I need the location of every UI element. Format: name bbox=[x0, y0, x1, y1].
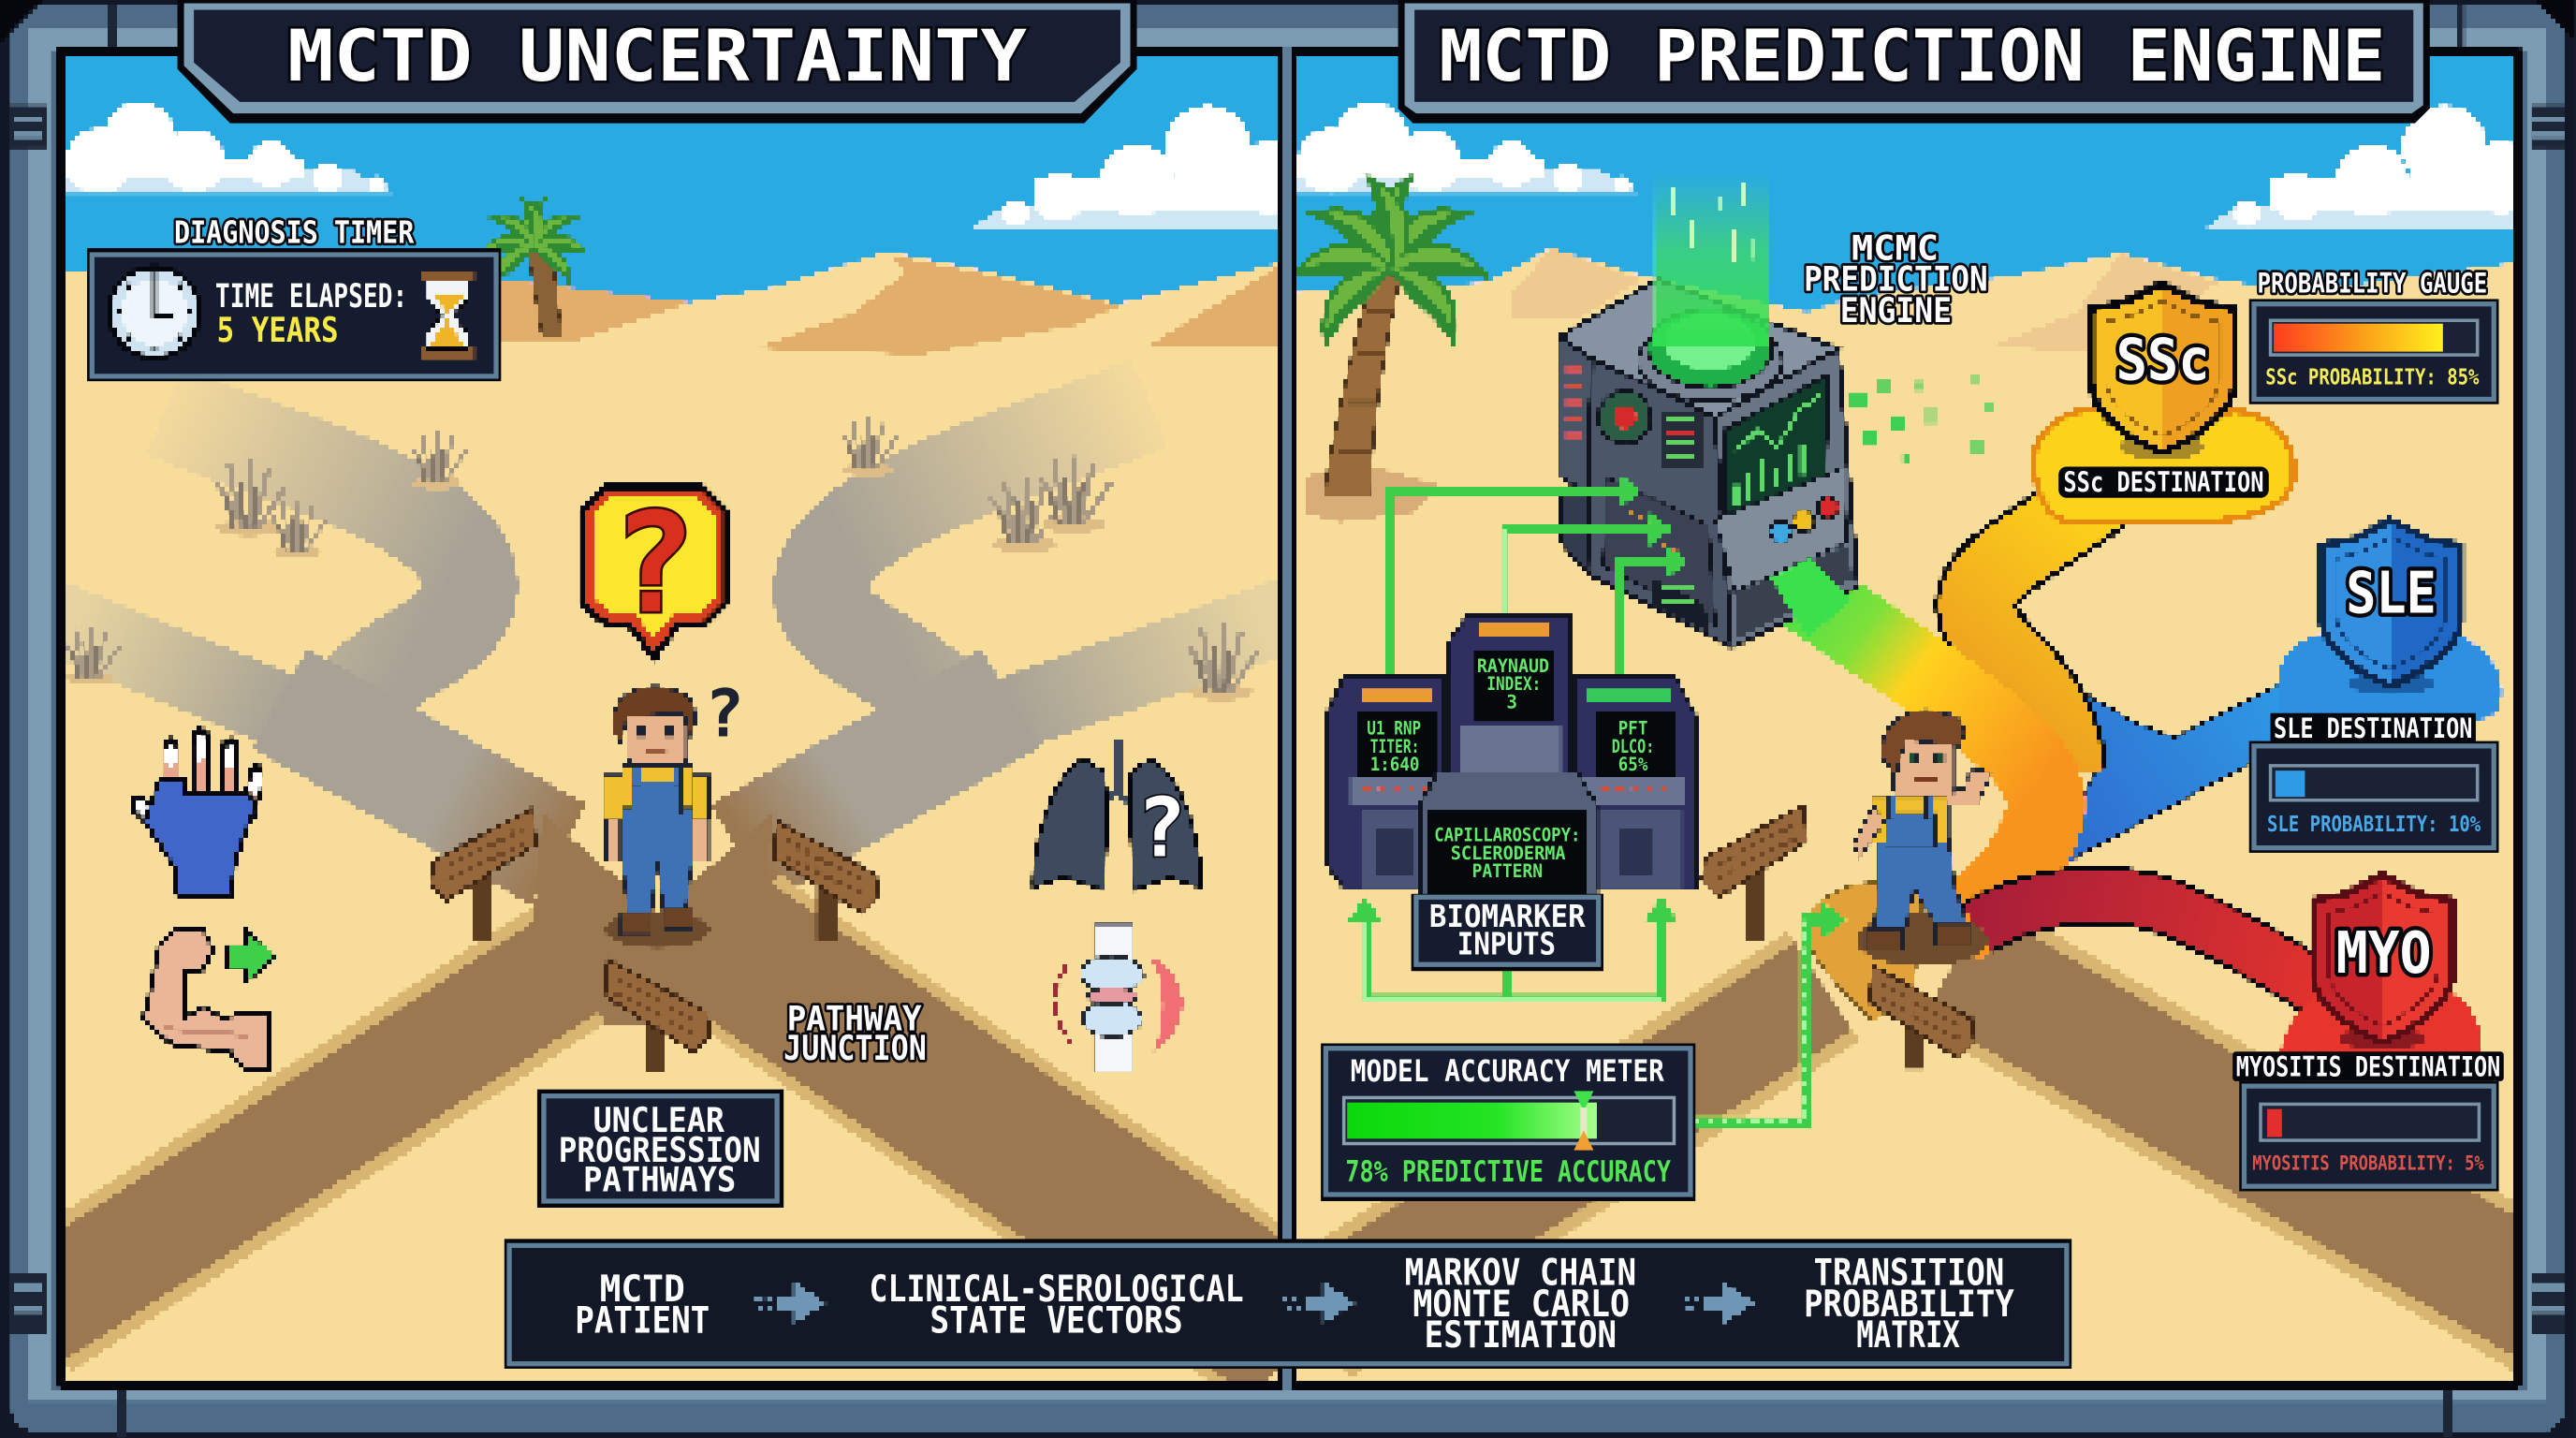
probability gauge: SLE: SLE PROBABILITY: 10% bbox=[2267, 813, 2481, 837]
right desert scene bbox=[1288, 57, 2563, 1380]
title banner: MCTD Uncertainty: MCTD UNCERTAINTY bbox=[287, 15, 1028, 97]
pathway junction label bbox=[783, 998, 927, 1068]
SLE destination pathway bbox=[2008, 633, 2502, 912]
dunes, right panel bbox=[1298, 248, 2513, 1380]
probability gauge: SSc: SSc PROBABILITY: 85% bbox=[2265, 366, 2480, 390]
probability gauge: myositis bbox=[2239, 1081, 2499, 1191]
arcade cabinet: U1 RNP bbox=[1325, 677, 1444, 889]
probability gauge: SSc: PROBABILITY GAUGE bbox=[2258, 267, 2487, 299]
accuracy connector arrow bbox=[1692, 901, 1847, 1123]
step: Markov chain Monte Carlo estimation: MONTE CARLO bbox=[1412, 1283, 1630, 1326]
step: Markov chain Monte Carlo estimation bbox=[1405, 1251, 1636, 1357]
green reactor dome bbox=[1638, 309, 1782, 401]
arrow: state vectors to estimation bbox=[1283, 1282, 1355, 1325]
pathway junction label: JUNCTION bbox=[783, 1028, 927, 1068]
confused patient character bbox=[605, 686, 710, 948]
step: MCTD patient: PATIENT bbox=[575, 1299, 710, 1342]
shield label: SLE: SLE bbox=[2346, 561, 2437, 627]
icons over panels bbox=[107, 265, 1754, 1325]
speech bubble with question mark bbox=[578, 483, 729, 664]
brown pathway junction bbox=[33, 814, 1298, 1339]
signposts, left panel bbox=[431, 809, 879, 1073]
bottom pipeline bar bbox=[505, 1239, 2071, 1369]
left desert scene bbox=[33, 57, 1305, 1380]
MCMC prediction engine label: MCMC bbox=[1852, 227, 1939, 268]
title banner: MCTD Prediction Engine bbox=[1398, 0, 2430, 124]
unclear progression pathways label: UNCLEAR bbox=[593, 1100, 725, 1140]
arcade screen text: Raynaud index: 3 bbox=[1506, 691, 1517, 712]
arrow: patient to state vectors bbox=[755, 1282, 827, 1325]
arcade screen text: U1 RNP titer: 1:640 bbox=[1370, 754, 1419, 775]
arcade screen text: capillaroscopy bbox=[1434, 825, 1580, 882]
probability gauge: SSc bbox=[2249, 267, 2499, 404]
step: transition probability matrix: PROBABILITY bbox=[1804, 1283, 2014, 1326]
myositis destination label: MYOSITIS DESTINATION bbox=[2236, 1051, 2500, 1083]
arcade screen text: Raynaud index bbox=[1477, 655, 1549, 712]
icon: hourglass bbox=[420, 271, 475, 359]
diagnosis timer panel bbox=[87, 214, 501, 381]
machine gear panel bbox=[1566, 370, 1715, 633]
MCMC prediction engine machine bbox=[1559, 172, 1858, 648]
arcade screen text: Raynaud index: INDEX: bbox=[1486, 673, 1541, 695]
icon: muscle weakness arm bbox=[143, 929, 276, 1071]
MCMC prediction engine label bbox=[1804, 227, 1988, 330]
faded gray pathways bbox=[50, 403, 1298, 855]
icon: joint bbox=[1055, 923, 1182, 1071]
arrow: estimation to matrix bbox=[1684, 1282, 1754, 1325]
model accuracy meter: MODEL ACCURACY METER bbox=[1351, 1055, 1665, 1089]
clouds, left panel bbox=[64, 102, 1305, 230]
biomarker inputs label: BIOMARKER bbox=[1429, 898, 1587, 934]
arcade screen text: PFT DLCO: PFT bbox=[1618, 718, 1647, 740]
accuracy bar bbox=[1344, 1091, 1674, 1151]
icon: Raynaud hand bbox=[138, 736, 256, 896]
diagnosis timer panel: TIME ELAPSED: bbox=[215, 277, 407, 315]
confident patient character bbox=[1853, 711, 1991, 966]
arcade cabinet: capillaroscopy bbox=[1419, 772, 1597, 896]
arcade screen text: PFT DLCO: DLCO: bbox=[1612, 736, 1654, 757]
shield label: MYO: MYO bbox=[2336, 920, 2432, 987]
arcade screen text: U1 RNP titer bbox=[1367, 718, 1421, 775]
predictive stream from engine bbox=[1791, 583, 2046, 929]
arcade screen text: capillaroscopy: PATTERN bbox=[1472, 860, 1543, 882]
clouds, right panel bbox=[1298, 102, 2537, 230]
MCMC prediction engine label: ENGINE bbox=[1840, 290, 1952, 330]
dry shrubs bbox=[66, 419, 1257, 701]
SSc destination label: SSc DESTINATION bbox=[2063, 466, 2264, 498]
shield: MYO bbox=[2310, 871, 2456, 1050]
orange junction tail bbox=[1804, 883, 1922, 1022]
shield label: SSc: SSc bbox=[2116, 327, 2210, 393]
step: Markov chain Monte Carlo estimation: ESTIMATION bbox=[1425, 1313, 1617, 1357]
unclear progression pathways label bbox=[537, 1090, 783, 1208]
model accuracy meter: 78% PREDICTIVE ACCURACY bbox=[1345, 1155, 1671, 1189]
pathway junction label: PATHWAY bbox=[787, 998, 922, 1038]
palm tree, right panel bbox=[1288, 166, 1492, 496]
diagnosis timer panel: 5 YEARS bbox=[217, 310, 339, 350]
probability gauge: SLE bbox=[2249, 741, 2499, 853]
title banner: MCTD Prediction Engine: MCTD PREDICTION ENGINE bbox=[1439, 15, 2385, 97]
icon: clock bbox=[107, 265, 202, 360]
arcade cabinet: PFT DLCO bbox=[1573, 677, 1695, 889]
step: transition probability matrix bbox=[1804, 1251, 2014, 1357]
machine screen bbox=[1723, 374, 1828, 522]
shield: SLE bbox=[2318, 516, 2465, 695]
step: clinical-serological state vectors: CLINICAL-SEROLOGICAL bbox=[869, 1268, 1244, 1311]
SLE destination label: SLE DESTINATION bbox=[2274, 712, 2472, 744]
step: clinical-serological state vectors bbox=[869, 1268, 1244, 1342]
arcade screen text: Raynaud index: RAYNAUD bbox=[1477, 655, 1549, 677]
machine buttons bbox=[1715, 468, 1853, 640]
myositis destination pathway bbox=[1976, 896, 2481, 1051]
diagnosis timer panel: DIAGNOSIS TIMER bbox=[174, 214, 415, 251]
palm tree, left panel bbox=[478, 192, 590, 337]
arcade screen text: U1 RNP titer: TITER: bbox=[1370, 736, 1419, 757]
green biomarker wires bbox=[1347, 896, 1679, 999]
biomarker inputs label bbox=[1412, 894, 1603, 971]
small question mark: ? bbox=[705, 675, 744, 752]
arcade screen text: U1 RNP titer: U1 RNP bbox=[1367, 718, 1421, 740]
SSc destination pathway bbox=[1976, 410, 2293, 772]
lung question mark: ? bbox=[1137, 780, 1186, 875]
arcade screen text: PFT DLCO: 65% bbox=[1618, 754, 1648, 775]
step: transition probability matrix: MATRIX bbox=[1856, 1313, 1960, 1357]
green data particles bbox=[1850, 374, 1993, 465]
title banner: MCTD Uncertainty bbox=[178, 0, 1137, 124]
model accuracy meter bbox=[1321, 1043, 1695, 1201]
sky, right panel bbox=[1298, 57, 2513, 386]
brown roads, right panel bbox=[1314, 961, 2563, 1323]
sky bbox=[66, 56, 1278, 304]
arcade cabinet: Raynaud index bbox=[1447, 616, 1571, 772]
signposts, right panel bbox=[1702, 805, 1975, 1070]
arcade screen text: PFT DLCO bbox=[1612, 718, 1654, 775]
arcade screen text: capillaroscopy: SCLERODERMA bbox=[1451, 843, 1566, 864]
arcade screen text: capillaroscopy: CAPILLAROSCOPY: bbox=[1434, 825, 1580, 846]
green stream mouth bbox=[1771, 559, 1853, 638]
biomarker inputs label: INPUTS bbox=[1457, 926, 1556, 962]
MCMC prediction engine label: PREDICTION bbox=[1804, 259, 1988, 300]
step: MCTD patient bbox=[575, 1268, 710, 1342]
dunes, left panel bbox=[64, 252, 1278, 1380]
step: transition probability matrix: TRANSITION bbox=[1814, 1251, 2004, 1294]
question mark on bubble: ? bbox=[612, 483, 695, 644]
unclear progression pathways label: PROGRESSION bbox=[559, 1130, 761, 1170]
icon: lungs bbox=[1033, 741, 1201, 890]
green hologram beam bbox=[1654, 172, 1769, 345]
step: Markov chain Monte Carlo estimation: MARKOV CHAIN bbox=[1405, 1251, 1636, 1294]
probability gauge: myositis: MYOSITIS PROBABILITY: 5% bbox=[2252, 1152, 2484, 1175]
step: MCTD patient: MCTD bbox=[600, 1268, 685, 1311]
step: clinical-serological state vectors: STATE VECTORS bbox=[929, 1299, 1183, 1342]
green input wires bbox=[1390, 475, 1689, 677]
shield: SSc bbox=[2088, 279, 2237, 460]
unclear progression pathways label: PATHWAYS bbox=[583, 1159, 736, 1199]
